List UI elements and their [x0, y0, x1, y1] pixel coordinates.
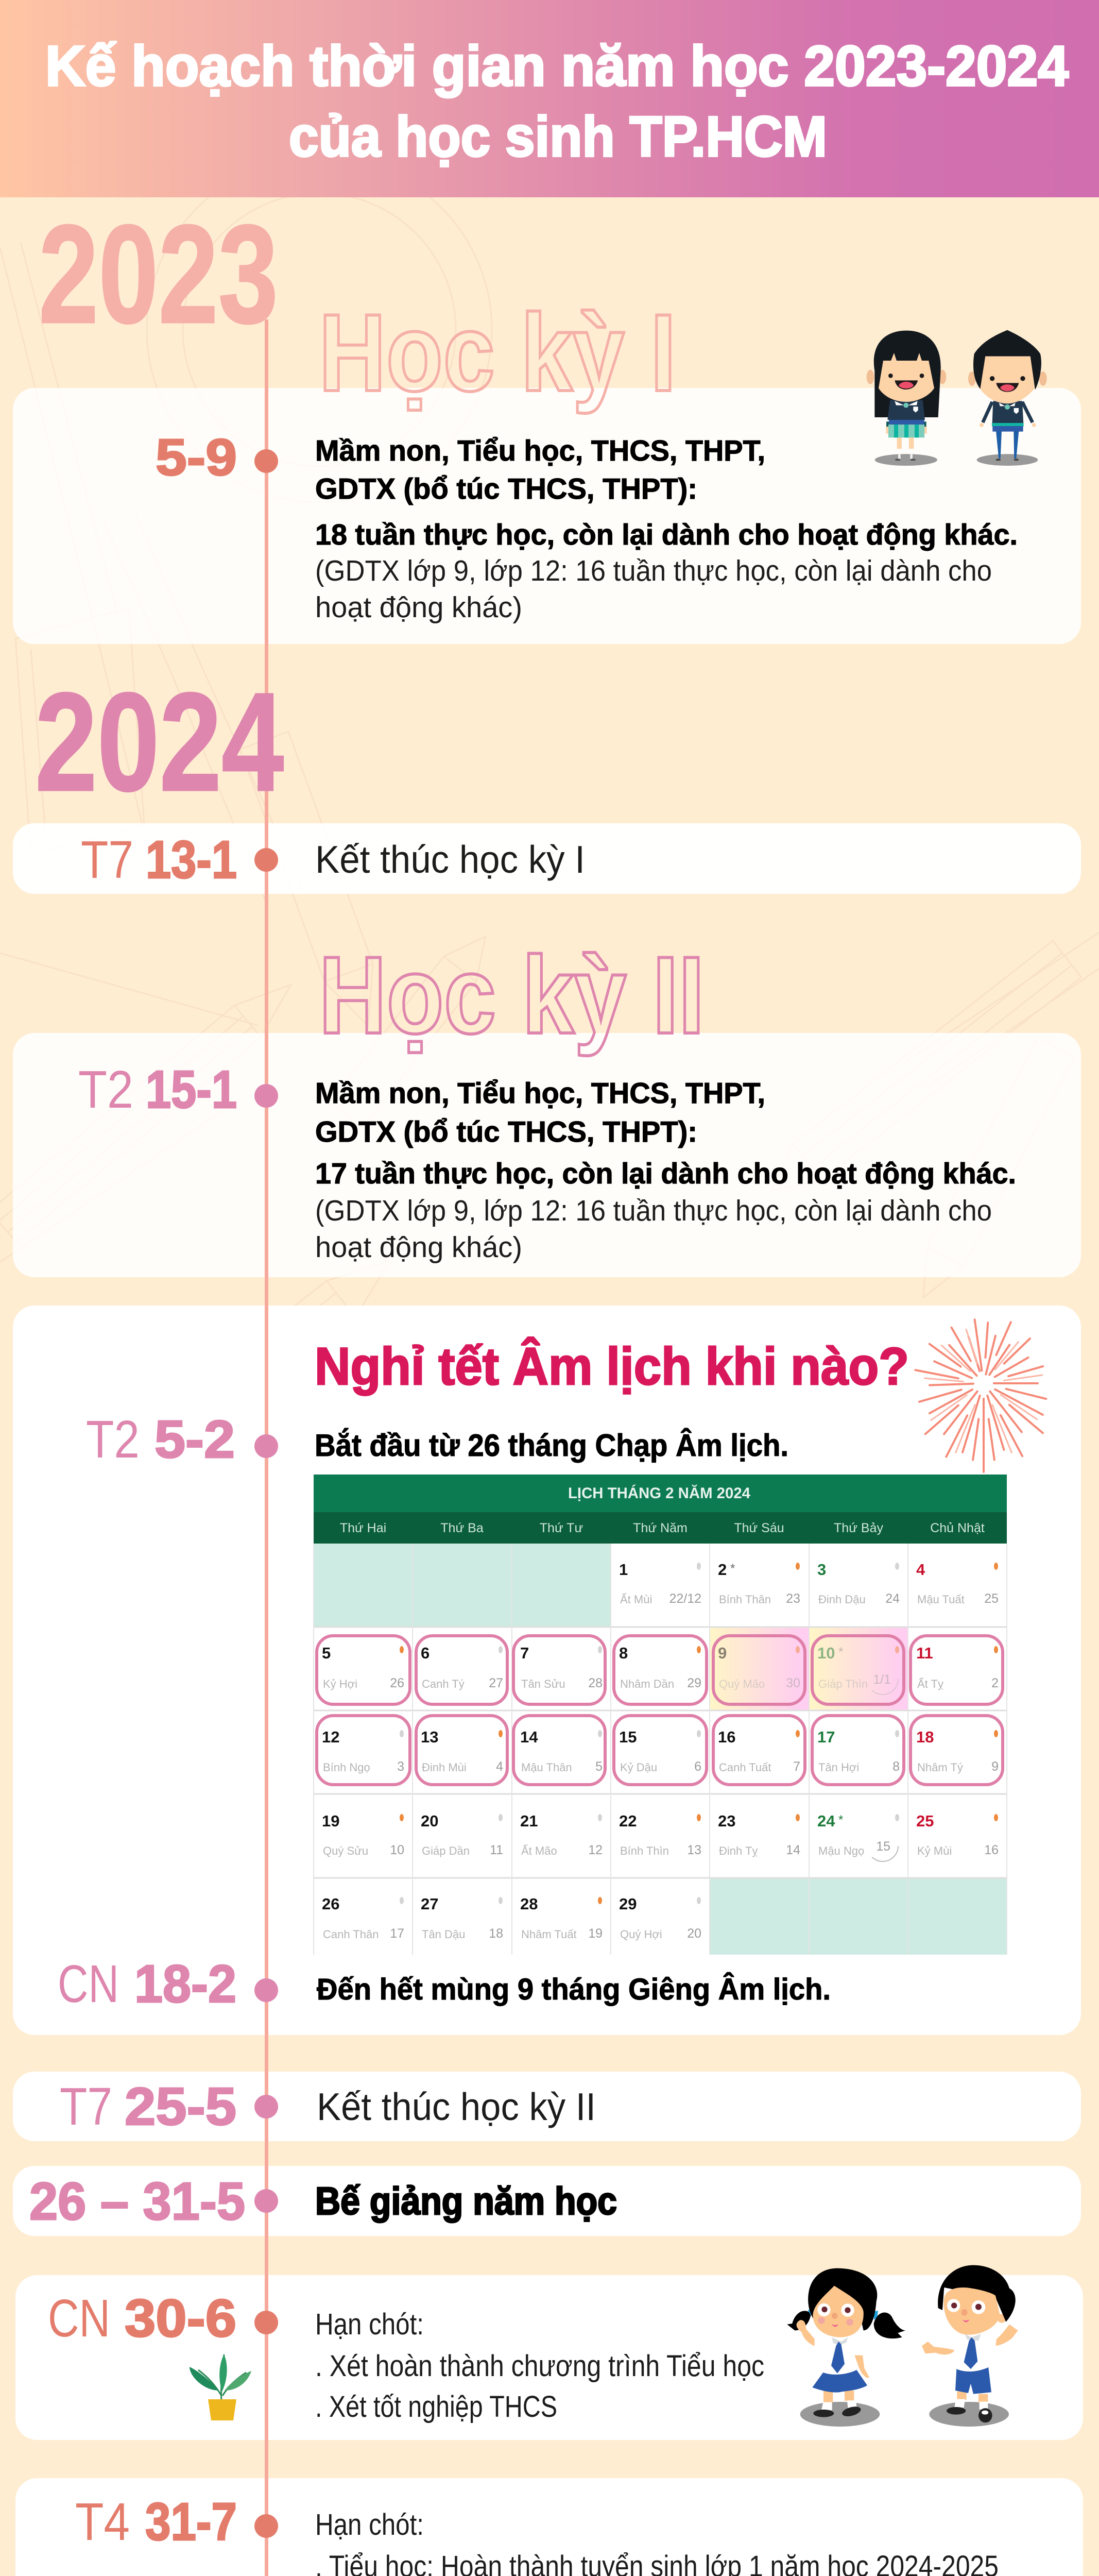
calendar week 2: 28	[588, 1676, 603, 1690]
title banner	[0, 0, 1099, 197]
semester 1 description: Mầm non, Tiểu học, THCS, THPT,	[315, 434, 765, 467]
calendar week 3: 4	[496, 1759, 503, 1774]
calendar week 2: *	[838, 1645, 843, 1659]
deadline list: . Xét hoàn thành chương trình Tiểu học	[315, 2349, 764, 2383]
semester 1 description: (GDTX lớp 9, lớp 12: 16 tuần thực học, còn lại dành cho	[315, 554, 992, 587]
deadline list	[315, 2308, 764, 2424]
calendar week 1: 2	[718, 1561, 727, 1579]
calendar week 1: 3	[817, 1561, 826, 1579]
calendar week 3: 5	[595, 1759, 603, 1774]
calendar week 4: Quý Sửu	[323, 1844, 368, 1857]
calendar week 4: 13	[687, 1843, 701, 1857]
date T7 13-1: T7	[81, 830, 133, 889]
heading: semester II outlined: Học kỳ II	[319, 934, 705, 1057]
date T2 15-1	[78, 1060, 237, 1119]
date 26 – 31-5: 26 – 31-5	[29, 2172, 245, 2231]
calendar week 4: Ất Mão	[521, 1844, 557, 1857]
calendar week 5: 26	[322, 1895, 339, 1913]
calendar week 3: 17	[817, 1728, 835, 1746]
date T2 5-2: 5-2	[154, 1410, 235, 1469]
calendar week 2: 10	[817, 1644, 835, 1662]
calendar week 1: Mậu Tuất	[917, 1593, 965, 1606]
calendar week 2: Kỷ Hợi	[323, 1677, 357, 1690]
calendar week 1: 22/12	[669, 1591, 701, 1606]
calendar week 2: Ất Tỵ	[917, 1677, 943, 1690]
calendar week 3: 13	[421, 1728, 438, 1746]
timeline entry: 5-9	[156, 429, 1018, 624]
calendar week 1	[619, 1561, 999, 1606]
date T2 5-2	[86, 1410, 235, 1469]
date T7 13-1: 13-1	[146, 830, 237, 889]
end of semester 2 text: Kết thúc học kỳ II	[317, 2085, 596, 2128]
calendar week 2: Canh Tý	[422, 1677, 465, 1690]
calendar week 3: 16	[718, 1728, 735, 1746]
calendar week 3: 7	[793, 1759, 800, 1774]
card: semester 1 start	[13, 388, 1081, 644]
calendar week 2	[322, 1644, 999, 1694]
enrollment deadline list: Hạn chót:	[315, 2508, 424, 2541]
calendar week 2: 30	[786, 1676, 800, 1690]
date CN 30-6: CN	[48, 2289, 110, 2348]
calendar empty cells and holiday highlight	[314, 1544, 1007, 1955]
calendar week 2: 7	[520, 1644, 529, 1662]
calendar week 3: 3	[397, 1759, 404, 1774]
calendar week 5: Canh Thân	[323, 1928, 379, 1941]
semester 2 description: hoạt động khác)	[315, 1231, 522, 1264]
calendar week 2: 1/1	[873, 1672, 891, 1687]
calendar week 4	[322, 1812, 999, 1861]
calendar week 4: 12	[588, 1843, 603, 1857]
calendar title bar	[314, 1475, 1007, 1512]
calendar week 1: *	[730, 1562, 735, 1575]
semester 2 description	[315, 1077, 1016, 1264]
date T4 31-7: 31-7	[145, 2492, 237, 2551]
calendar week 3: Kỷ Dậu	[620, 1761, 657, 1774]
calendar week 2: 29	[687, 1676, 701, 1690]
title line 1: Kế hoạch thời gian năm học 2023-2024	[45, 35, 1069, 98]
calendar week 4: 10	[390, 1843, 404, 1857]
timeline entry: 31-7	[75, 2492, 999, 2576]
date T2 15-1: T2	[78, 1060, 133, 1119]
timeline entry: 18-2	[58, 1954, 831, 2013]
student boy with tie	[922, 2265, 1018, 2427]
timeline entry: 30-6	[48, 2289, 764, 2424]
enrollment deadline list	[315, 2508, 999, 2576]
calendar weekday header: Thứ Tư	[540, 1521, 583, 1535]
title line 2: của học sinh TP.HCM	[289, 105, 827, 168]
calendar week 2: Tân Sửu	[521, 1677, 565, 1690]
marker dot	[254, 1978, 278, 2002]
calendar week 3: 12	[322, 1728, 339, 1746]
date CN 30-6	[48, 2289, 236, 2348]
timeline entry: 13-1	[81, 830, 585, 889]
marker dot	[254, 848, 278, 872]
icon: potted plant	[190, 2354, 251, 2420]
calendar week 5: 20	[687, 1926, 701, 1941]
background pattern: school supplies sketch	[0, 157, 1099, 1520]
calendar week 1: Đinh Dậu	[818, 1593, 866, 1606]
calendar week 1: 24	[885, 1591, 900, 1606]
card: lunar new year holiday	[13, 1306, 1081, 2035]
card: end of semester 2	[13, 2072, 1081, 2141]
calendar week 3: 14	[520, 1728, 538, 1746]
semester 2 description: GDTX (bổ túc THCS, THPT):	[315, 1115, 697, 1148]
calendar week 2: 26	[390, 1676, 404, 1690]
year heading 2023: 2023	[39, 196, 278, 352]
calendar week 5: Tân Dậu	[422, 1928, 465, 1941]
calendar week 3: 18	[916, 1728, 934, 1746]
calendar week 2: 8	[619, 1644, 628, 1662]
end of semester 1 text: Kết thúc học kỳ I	[315, 838, 585, 881]
calendar February 2024	[314, 1475, 1007, 1955]
calendar week 5: 19	[588, 1926, 603, 1941]
heading: semester I outlined: Học kỳ I	[319, 292, 676, 414]
marker dot	[254, 2095, 278, 2119]
date T2 5-2: T2	[86, 1410, 140, 1469]
calendar week 1: Ất Mùi	[620, 1593, 652, 1606]
date CN 30-6: 30-6	[125, 2289, 236, 2348]
timeline entry: 15-1	[78, 1060, 1016, 1264]
calendar week 4: 25	[916, 1812, 934, 1830]
calendar week 3: 8	[892, 1759, 900, 1774]
calendar week 4: 15	[876, 1839, 890, 1854]
calendar weekday header: Thứ Bảy	[834, 1521, 883, 1535]
card: closing ceremony	[13, 2166, 1081, 2236]
card: semester 2 start	[13, 1033, 1081, 1277]
calendar week 1: 25	[984, 1591, 999, 1606]
calendar week 3: 6	[694, 1759, 701, 1774]
calendar title bar: LỊCH THÁNG 2 NĂM 2024	[568, 1484, 750, 1502]
calendar week 3: Nhâm Tý	[917, 1761, 963, 1774]
semester 1 description: 18 tuần thực học, còn lại dành cho hoạt động khác.	[315, 518, 1018, 551]
date T2 15-1: 15-1	[146, 1060, 237, 1119]
calendar week 4: 21	[520, 1812, 538, 1830]
year heading 2024: 2024	[35, 664, 284, 820]
calendar week 3: Mậu Thân	[521, 1761, 572, 1774]
card: deadline 30-6	[15, 2275, 1083, 2440]
marker dot	[254, 449, 278, 473]
calendar week 2: Giáp Thìn	[818, 1677, 868, 1690]
calendar week 5: Quý Hợi	[620, 1928, 662, 1941]
date T7 25-5: T7	[60, 2077, 112, 2136]
calendar weekday header: Chủ Nhật	[930, 1521, 985, 1535]
heading: when is the lunar new year holiday: Nghỉ tết Âm lịch khi nào?	[315, 1337, 909, 1396]
calendar week 4: 23	[718, 1812, 735, 1830]
calendar weekday header: Thứ Ba	[440, 1521, 484, 1535]
calendar week 4: 22	[619, 1812, 637, 1830]
calendar weekday header	[314, 1512, 1007, 1544]
deadline list: Hạn chót:	[315, 2308, 424, 2341]
date T4 31-7	[75, 2492, 237, 2551]
calendar week 2: Nhâm Dần	[620, 1677, 674, 1690]
marker dot	[254, 2514, 278, 2538]
illustration: two students in dark uniform	[867, 330, 1047, 466]
semester 2 description: Mầm non, Tiểu học, THCS, THPT,	[315, 1077, 765, 1110]
date 5-9: 5-9	[156, 429, 237, 486]
holiday start text: Bắt đầu từ 26 tháng Chạp Âm lịch.	[315, 1428, 788, 1463]
calendar week 4: Bính Thìn	[620, 1844, 669, 1857]
calendar week 5: 29	[619, 1895, 637, 1913]
calendar week 5	[322, 1895, 701, 1941]
timeline entry: 5-2	[86, 1410, 788, 1469]
holiday day highlights	[317, 1636, 1003, 1785]
holiday end text: Đến hết mùng 9 tháng Giêng Âm lịch.	[317, 1973, 831, 2006]
calendar week 2: 5	[322, 1644, 331, 1662]
calendar week 5: 17	[390, 1926, 404, 1941]
date T4 31-7: T4	[75, 2492, 130, 2551]
calendar week 5: 27	[421, 1895, 438, 1913]
calendar week 4: *	[838, 1813, 843, 1827]
calendar week 4: 20	[421, 1812, 438, 1830]
calendar week 2: 11	[916, 1644, 933, 1662]
calendar week 3: Đinh Mùi	[422, 1761, 467, 1774]
calendar week 3: 15	[619, 1728, 637, 1746]
calendar week 4: 24	[817, 1812, 835, 1830]
calendar week 4: 19	[322, 1812, 339, 1830]
closing ceremony text: Bế giảng năm học	[315, 2179, 617, 2223]
calendar week 4: Đinh Tỵ	[719, 1844, 758, 1857]
timeline entry: 25-5	[60, 2077, 596, 2136]
calendar week 2: Quý Mão	[719, 1677, 765, 1690]
illustration: two students in white shirts	[787, 2265, 1018, 2427]
calendar week 5: 18	[489, 1926, 503, 1941]
student girl with pigtails	[787, 2268, 905, 2427]
card: deadline 31-7	[15, 2478, 1083, 2576]
semester 1 description	[315, 434, 1018, 624]
calendar week 1: 4	[916, 1561, 925, 1579]
calendar week 4: Giáp Dần	[422, 1844, 470, 1857]
calendar week 3: 9	[991, 1759, 999, 1774]
student boy	[968, 330, 1047, 466]
calendar week 2: 9	[718, 1644, 727, 1662]
calendar weekday header: Thứ Sáu	[734, 1521, 784, 1535]
semester 1 description: hoạt động khác)	[315, 591, 522, 624]
calendar week 3	[322, 1728, 999, 1774]
timeline entry: 26-31-5	[29, 2172, 617, 2231]
date CN 18-2	[58, 1954, 236, 2013]
deadline list: . Xét tốt nghiệp THCS	[315, 2390, 557, 2424]
calendar week 3: Canh Tuất	[719, 1761, 771, 1774]
semester 2 description: 17 tuần thực học, còn lại dành cho hoạt động khác.	[315, 1157, 1016, 1190]
calendar week 4: 11	[490, 1843, 503, 1857]
marker dot	[254, 2189, 278, 2213]
marker dot	[254, 2311, 278, 2334]
calendar week 1: 23	[786, 1591, 800, 1606]
student girl	[867, 331, 946, 466]
date T7 25-5	[60, 2077, 236, 2136]
marker dot	[254, 1084, 278, 1108]
calendar week 4: 14	[786, 1843, 800, 1857]
calendar week 3: Bính Ngọ	[323, 1761, 370, 1774]
timeline axis	[265, 319, 268, 2576]
calendar week 1: 1	[619, 1561, 628, 1579]
calendar week 2: 2	[991, 1676, 999, 1690]
date T7 13-1	[81, 830, 237, 889]
calendar week 4: Mậu Ngọ	[818, 1844, 864, 1857]
calendar week 5: Nhâm Tuất	[521, 1928, 577, 1941]
calendar weekday header: Thứ Hai	[340, 1521, 386, 1535]
card: end of semester 1	[13, 823, 1081, 894]
date CN 18-2: 18-2	[134, 1954, 236, 2013]
date T7 25-5: 25-5	[125, 2077, 236, 2136]
icon: fireworks	[915, 1319, 1046, 1472]
calendar week 2: 6	[421, 1644, 430, 1662]
date CN 18-2: CN	[58, 1954, 119, 2013]
calendar week 1: Bính Thân	[719, 1593, 771, 1606]
semester 2 description: (GDTX lớp 9, lớp 12: 16 tuần thực học, còn lại dành cho	[315, 1194, 992, 1227]
calendar weekday header: Thứ Năm	[633, 1521, 688, 1535]
marker dot	[254, 1434, 278, 1458]
calendar week 5: 28	[520, 1895, 538, 1913]
semester 1 description: GDTX (bổ túc THCS, THPT):	[315, 472, 697, 505]
calendar week 4: 16	[984, 1843, 999, 1857]
calendar week 4: Kỷ Mùi	[917, 1844, 952, 1857]
calendar week 2: 27	[489, 1676, 503, 1690]
calendar week 3: Tân Hợi	[818, 1761, 859, 1774]
